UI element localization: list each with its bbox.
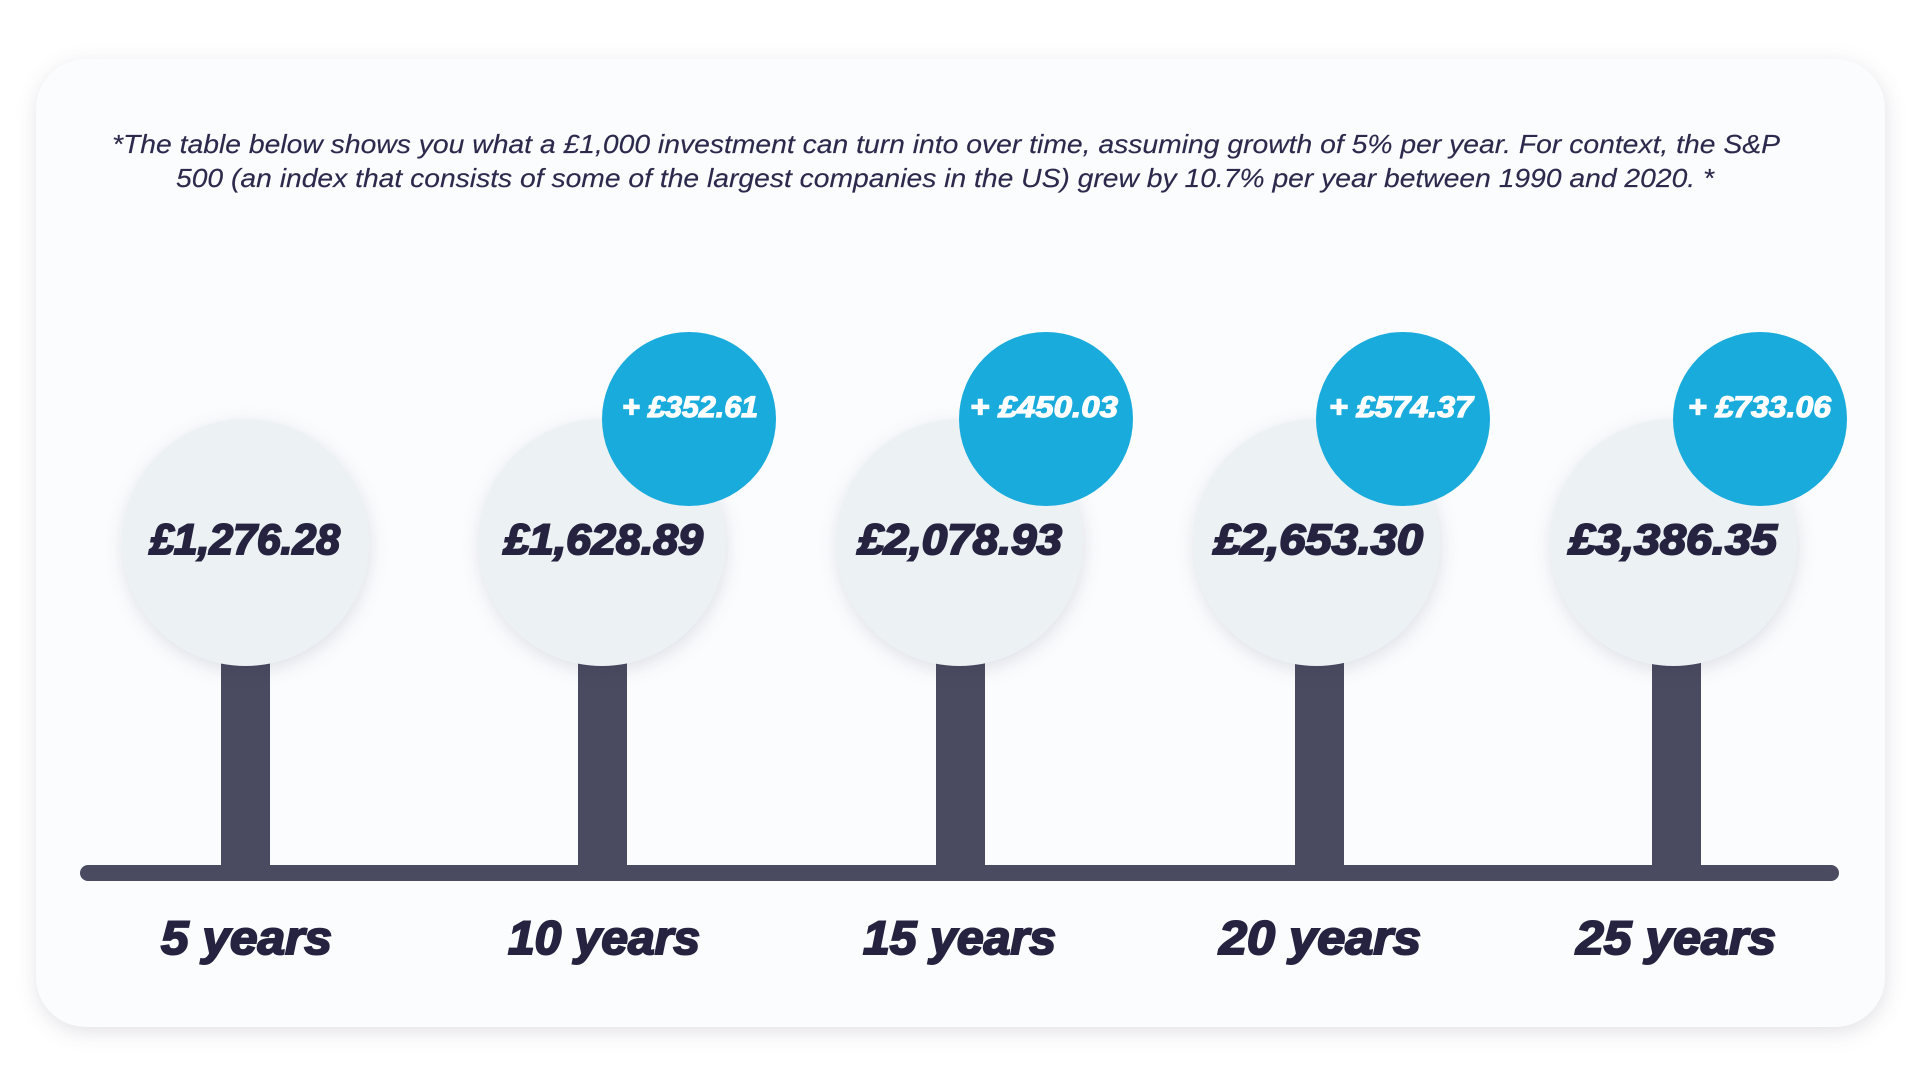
- badge: 20 years increase: + £574.37: [1329, 391, 1474, 424]
- axis label: 20 years: 20 years: [1218, 911, 1421, 964]
- marker: 10 years value: [478, 419, 726, 666]
- axis label: 15 years: 15 years: [863, 911, 1056, 964]
- marker: 10 years value: £1,628.89: [502, 516, 703, 564]
- text block: introductory note: 500 (an index that consists of some of the largest companies in the US) grew by 10.7% per year between 1990 and 2020. *: [176, 163, 1715, 193]
- text block: introductory note: *The table below shows you what a £1,000 investment can turn into over time, assuming growth of 5% per year. For context, the S&P: [112, 129, 1781, 159]
- axis label: 5 years: 5 years: [161, 911, 332, 964]
- axis label: 25 years: 25 years: [1575, 911, 1776, 964]
- marker: 15 years value: £2,078.93: [856, 516, 1062, 564]
- marker: 25 years value: [1550, 419, 1797, 666]
- axis label: 10 years: 10 years: [508, 911, 700, 964]
- badge: 15 years increase: + £450.03: [970, 391, 1118, 424]
- badge: 20 years increase: [1316, 332, 1490, 506]
- chart: timeline axis and stems: [80, 650, 1839, 881]
- marker: 5 years value: £1,276.28: [148, 516, 340, 564]
- marker: 20 years value: [1193, 419, 1440, 666]
- badge: 10 years increase: + £352.61: [622, 391, 758, 424]
- badge: 10 years increase: [602, 332, 776, 506]
- text block: introductory note: [112, 129, 1781, 193]
- badge: 15 years increase: [959, 332, 1133, 506]
- marker: 25 years value: £3,386.35: [1567, 516, 1778, 564]
- badge: 25 years increase: + £733.06: [1688, 391, 1831, 424]
- badge: 25 years increase: [1673, 332, 1847, 506]
- marker: 15 years value: [836, 419, 1083, 666]
- marker: 5 years value: [122, 419, 369, 666]
- marker: 20 years value: £2,653.30: [1212, 516, 1423, 564]
